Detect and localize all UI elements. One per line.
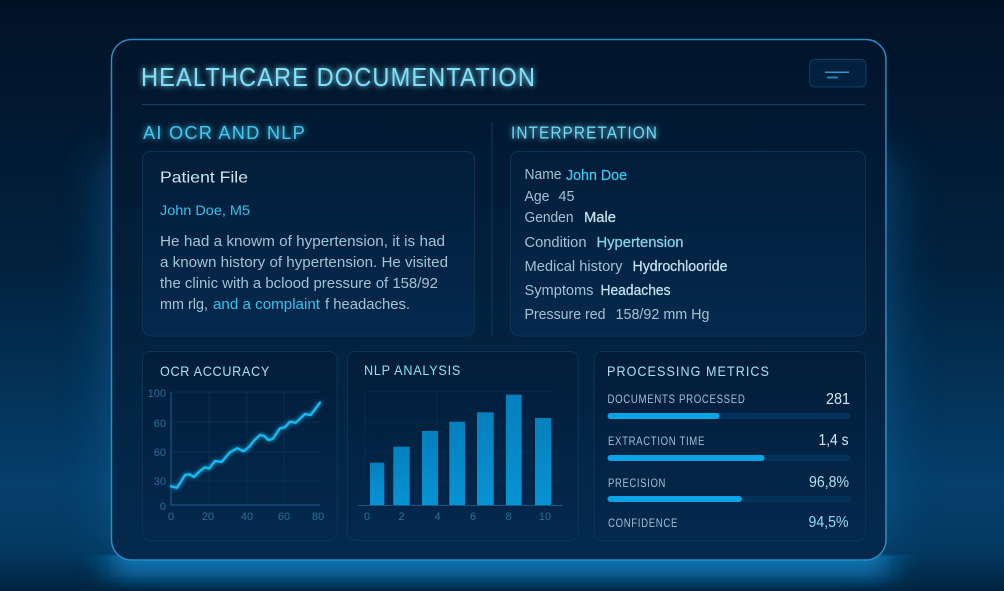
field rows: Medical history	[524, 259, 623, 275]
metric: confidence: 94,5%	[808, 514, 848, 531]
panel: processing metrics	[594, 352, 866, 540]
line chart: 0	[160, 501, 166, 513]
line chart: 80	[312, 511, 324, 523]
panel: OCR accuracy	[142, 352, 337, 540]
processing metrics heading: PROCESSING METRICS	[607, 363, 770, 379]
field rows: Male	[584, 210, 616, 226]
field rows: Name	[524, 167, 562, 183]
line chart: 60	[154, 447, 166, 459]
menu button icon	[810, 60, 866, 87]
metric: confidence: CONFIDENCE	[608, 518, 678, 530]
patient narrative: the clinic with a bclood pressure of 158/92	[160, 275, 438, 292]
NLP analysis heading: NLP ANALYSIS	[364, 362, 461, 378]
metric: extraction time: EXTRACTION TIME	[608, 436, 705, 448]
line chart	[148, 388, 324, 523]
field rows: Hypertension	[596, 235, 684, 251]
metric: precision	[608, 474, 850, 502]
field rows: 158/92 mm Hg	[616, 307, 710, 323]
main panel	[112, 40, 886, 560]
header divider	[142, 104, 865, 106]
patient narrative	[160, 233, 448, 313]
OCR accuracy heading: OCR ACCURACY	[160, 363, 270, 379]
line chart: 20	[202, 511, 214, 523]
metric: documents processed: 281	[826, 391, 850, 408]
title: HEALTHCARE DOCUMENTATION	[141, 62, 536, 92]
bar chart: 6	[470, 511, 476, 523]
patient narrative: and a complaint	[213, 296, 321, 313]
field rows	[524, 167, 728, 323]
field rows: Genden	[524, 210, 574, 226]
column divider	[491, 122, 493, 336]
patient narrative: mm rlg,	[160, 296, 208, 313]
line chart: 30	[154, 476, 166, 488]
accuracy trend line	[171, 403, 320, 488]
field rows: Pressure red	[524, 307, 606, 323]
bars	[370, 395, 551, 505]
field rows: Age	[524, 189, 550, 205]
field rows: Headaches	[600, 283, 670, 299]
line chart: 0	[168, 511, 174, 523]
metric: documents processed	[608, 391, 850, 419]
line chart: 60	[278, 511, 290, 523]
line chart: 60	[154, 418, 166, 430]
bar chart	[358, 392, 563, 523]
metric: extraction time	[608, 432, 850, 461]
field rows: John Doe	[566, 168, 627, 184]
bar chart: 8	[505, 511, 512, 523]
field rows: Symptoms	[524, 283, 594, 299]
section heading: interpretation: INTERPRETATION	[511, 122, 658, 142]
bar chart: 0	[364, 511, 370, 523]
patient narrative: f headaches.	[325, 296, 410, 313]
panel: patient file	[142, 152, 474, 336]
bar chart: 10	[539, 511, 551, 523]
field rows: Hydrochlooride	[632, 259, 728, 275]
metric: documents processed: DOCUMENTS PROCESSED	[608, 394, 746, 406]
metric: extraction time: 1,4 s	[818, 432, 848, 449]
metric: precision: PRECISION	[608, 478, 666, 490]
bar chart: 2	[398, 511, 405, 523]
patient narrative: He had a knowm of hypertension, it is had	[160, 233, 445, 250]
metric: confidence	[608, 514, 848, 531]
field rows: Condition	[524, 235, 586, 251]
line chart: 100	[148, 388, 166, 400]
patient file heading: Patient File	[160, 170, 248, 186]
bar chart: 4	[434, 511, 441, 523]
metric: precision: 96,8%	[809, 474, 849, 491]
line chart: 40	[241, 511, 253, 523]
field rows: 45	[558, 189, 574, 205]
patient name: John Doe, M5	[160, 202, 250, 218]
panel: NLP analysis	[348, 352, 578, 540]
section heading: AI OCR and NLP: AI OCR AND NLP	[143, 123, 306, 143]
patient narrative: a known history of hypertension. He visited	[160, 254, 448, 271]
panel: interpretation	[510, 152, 866, 336]
